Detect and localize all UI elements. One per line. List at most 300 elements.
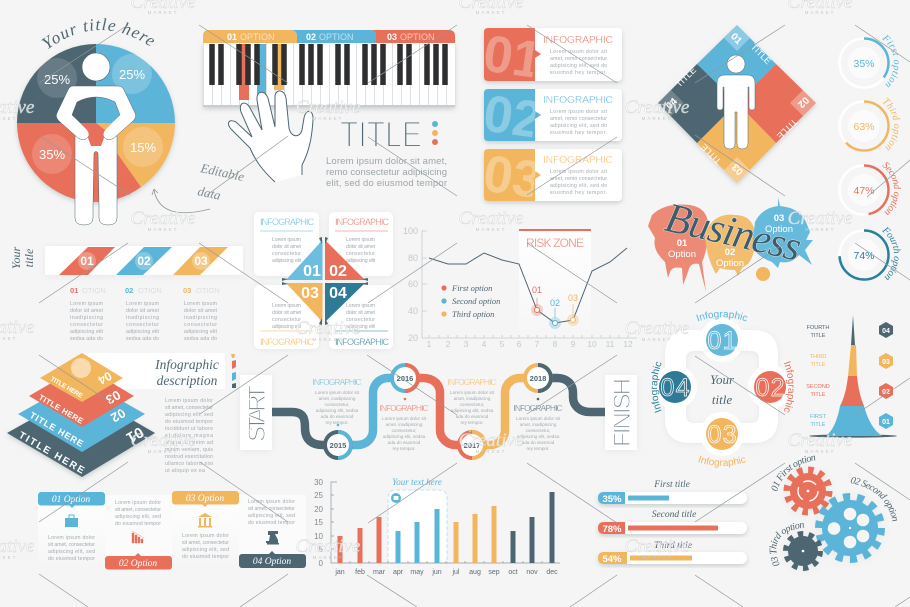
panel: business splats: 03 xyxy=(774,213,784,224)
panel: business splats: Option xyxy=(716,258,744,269)
step 03: adipiscing elit, sed xyxy=(182,547,229,553)
panel: card 02: eiusmod hey tempor. xyxy=(550,130,607,136)
panel: start-finish timeline: ada do eiusmod xyxy=(388,440,421,445)
step 01: do eiusmod tempor xyxy=(48,556,95,562)
panel: start-finish timeline: consectetur, xyxy=(460,402,484,407)
chart: line chart with risk zone: 1 xyxy=(427,339,432,349)
panel: start-finish timeline xyxy=(240,363,637,460)
panel: card 02: adipisicing elit, sed do xyxy=(550,123,607,129)
watermark captions: MARKET xyxy=(642,116,672,121)
step 01: sit amet, consectetur xyxy=(48,542,95,548)
panel: start-finish timeline: Lorem ipsum dolor sit xyxy=(450,390,495,395)
panel: four cards with central diamond: Lorem ipsum xyxy=(346,237,375,243)
panel: four cards with central diamond: consectetur xyxy=(272,251,301,257)
chart: line chart with risk zone: 10 xyxy=(587,339,597,349)
watermark captions: MARKET xyxy=(313,116,343,121)
icon: red gear xyxy=(788,470,828,512)
panel: diamond with person: 01 xyxy=(728,31,744,47)
panel: card 02: 02 xyxy=(480,85,545,150)
step 04: 04 Option xyxy=(253,557,291,567)
panel: card 03: eiusmod hey tempor. xyxy=(550,190,607,196)
step 02: 02 Option xyxy=(119,559,157,569)
step 04: sit amet, consectetur xyxy=(248,506,295,512)
watermarks: Creative xyxy=(131,430,195,451)
panel: card 01: Lorem ipsum dolor sit xyxy=(550,49,608,55)
watermark captions: MARKET xyxy=(805,10,835,15)
icon: dark gear xyxy=(786,534,820,568)
bar 54% xyxy=(598,541,747,565)
legend: Second option xyxy=(452,296,500,306)
option tabs: 03 xyxy=(387,32,397,42)
panel: diagonal ribbon with options: dolor sit amet xyxy=(184,308,218,314)
panel: four cards with central diamond: INFOGRAPHIC xyxy=(335,337,390,347)
step 01: 01 Option xyxy=(52,495,90,505)
chart: monthly bar chart: 10 xyxy=(314,532,324,541)
panel: card 03: amet, remo consectetur xyxy=(550,176,607,182)
chart: tower: TITLE xyxy=(811,333,826,339)
text block: ut aliquip ex ea xyxy=(165,468,205,474)
chart: line chart with risk zone: 40 xyxy=(408,306,418,316)
panel: card 01: INFOGRAPHIC xyxy=(543,34,613,46)
panel: diagonal ribbon with options: consectetur xyxy=(70,322,103,328)
chart: donut 47%: 47% xyxy=(853,185,875,197)
panel: diagonal ribbon with options: sedsa ada do xyxy=(184,336,217,342)
risk zone band: RISK ZONE xyxy=(526,236,584,250)
panel: four cards with central diamond: INFOGRAPHIC xyxy=(335,217,390,227)
panel: four cards with central diamond xyxy=(254,212,393,349)
panel: diagonal ribbon with options: Lorem ipsum xyxy=(126,301,159,307)
panel: start-finish timeline: ada do eiusmod xyxy=(522,440,555,445)
chart: tower: TITLE xyxy=(811,362,826,368)
watermark captions: MARKET xyxy=(642,555,672,560)
chart: tower: SECOND xyxy=(806,384,830,390)
panel: layered stack: TITLE HERE xyxy=(37,393,85,426)
panel: diagonal ribbon with options: 03 xyxy=(194,254,208,268)
chart: monthly bar chart xyxy=(314,477,560,576)
panel: diagonal ribbon with options: dolor sit amet xyxy=(126,308,160,314)
chart: tower: FOURTH xyxy=(807,325,829,331)
watermarks: Creative xyxy=(296,318,360,339)
text block xyxy=(165,398,213,474)
icon: standing person xyxy=(717,55,755,149)
panel: diamond with person: TITLE xyxy=(674,65,698,89)
panel: layered stack: TITLE HERE xyxy=(16,430,86,477)
step 04: do eiusmod tempor xyxy=(248,520,295,526)
panel: start-finish timeline: ada do eiusmod xyxy=(456,414,489,419)
panel: diagonal ribbon with options: inadipiscing xyxy=(126,315,159,321)
step 03 xyxy=(172,491,239,560)
watermarks: Creative xyxy=(296,536,360,557)
panel: card 03: 03 xyxy=(480,145,545,210)
highlight box: Your text here xyxy=(392,477,442,487)
panel: layered stack: 02 xyxy=(108,405,128,426)
icon: person holding belly xyxy=(56,53,136,225)
panel: layered stack: TITLE HERE xyxy=(49,376,84,400)
bar 78%: 78% xyxy=(602,524,622,535)
label: third option: Third option xyxy=(882,98,900,150)
panel: four step loop: Infographic xyxy=(651,362,662,413)
central diamond xyxy=(282,237,368,325)
panel: card 01: adipisicing elit, sed do xyxy=(550,63,607,69)
watermarks: Creative xyxy=(788,208,852,229)
risk zone band xyxy=(519,229,591,336)
panel: four cards with central diamond: dolor sit amet xyxy=(346,310,376,316)
panel: four step loop: 02 xyxy=(756,374,784,402)
panel: layered stack: TITLE HERE xyxy=(28,410,85,449)
central diamond: 01 xyxy=(303,263,321,280)
markers 01 02 03 xyxy=(531,285,579,329)
panel: four option steps xyxy=(38,491,306,570)
text block: et dolore magna xyxy=(165,433,213,439)
chart: monthly bar chart: dec xyxy=(546,569,558,576)
panel: four cards with central diamond: consectetur xyxy=(346,251,375,257)
watermark captions: MARKET xyxy=(148,10,178,15)
center title: Your xyxy=(710,372,735,387)
panel: start-finish timeline: rey tempor. xyxy=(461,420,483,425)
step 02: Lorem ipsum dolor xyxy=(115,500,161,506)
chart: tower: TITLE xyxy=(811,392,826,398)
panel: start-finish timeline: Lorem ipsum dolor sit xyxy=(315,390,360,395)
option tabs: 02 xyxy=(306,32,316,42)
chart: monthly bar chart: jan xyxy=(334,569,345,576)
label: first option: First option xyxy=(882,34,899,88)
chart: donut 63%: 63% xyxy=(853,121,875,133)
chart: line chart with risk zone: 20 xyxy=(408,333,418,343)
option tabs: OPTION xyxy=(400,32,435,42)
panel: four cards with central diamond: INFOGRAPHIC xyxy=(260,217,314,227)
step 02: do eiusmod tempor xyxy=(115,521,161,527)
node 2017: 2017 xyxy=(464,441,480,450)
bar 54%: 54% xyxy=(602,554,622,565)
step 03: 03 Option xyxy=(186,494,224,504)
text block xyxy=(326,156,447,189)
panel: four cards with central diamond: adipiscing elit xyxy=(346,258,376,264)
watermarks: Creative xyxy=(625,536,689,557)
panel: diamond with person: 03 xyxy=(730,161,746,177)
watermarks: Creative xyxy=(296,97,360,118)
panel: diagonal ribbon with options: OTION xyxy=(196,286,220,295)
panel: card 01: 01 xyxy=(480,25,545,90)
chart: tower xyxy=(806,315,897,438)
bar 54%: Third title xyxy=(654,541,692,551)
panel: business splats: Option xyxy=(668,249,696,260)
step 04: adipiscing elit, sed xyxy=(248,513,295,519)
panel: four cards with central diamond: adipiscing elit xyxy=(272,324,302,330)
watermarks: Creative xyxy=(625,97,689,118)
panel: diagonal ribbon with options: inadipiscing xyxy=(70,315,103,321)
bar 35%: 35% xyxy=(602,494,622,505)
panel: card 02 xyxy=(482,89,624,145)
panel: four step loop: 04 xyxy=(660,374,690,402)
watermark captions: MARKET xyxy=(642,337,672,342)
panel: diamond with person xyxy=(658,25,816,183)
markers 01 02 03: 01 xyxy=(532,285,542,295)
start label: START xyxy=(244,385,271,442)
chart: donut 35% xyxy=(838,34,899,88)
panel: card 01: eiusmod hey tempor. xyxy=(550,70,607,76)
chart: monthly bar chart: jun xyxy=(431,569,442,576)
text block: do eiusmod tempor xyxy=(165,419,213,425)
panel: diamond with person: TITLE xyxy=(699,142,723,166)
legend: First option xyxy=(451,283,492,293)
chart: line chart with risk zone: 100 xyxy=(403,226,418,236)
chart: line chart with risk zone: 8 xyxy=(553,339,558,349)
panel: pie chart with person: 15% xyxy=(130,140,156,155)
panel: card 01: amet, remo consectetur xyxy=(550,56,607,62)
panel: diagonal ribbon with options: adipiscing elit xyxy=(126,329,160,335)
panel: layered stack: 01 xyxy=(123,423,146,446)
panel: diagonal ribbon with options: sedsa ada do xyxy=(70,336,103,342)
chart: monthly bar chart: apr xyxy=(393,569,404,576)
panel: pie chart with person: 25% xyxy=(119,67,145,82)
chart: line chart with risk zone: 7 xyxy=(535,339,540,349)
panel: four step loop xyxy=(651,311,794,468)
bar 78%: Second title xyxy=(652,510,696,520)
heading: infographic description: Infographic xyxy=(154,357,219,372)
text block: sit amet, consectetur xyxy=(165,405,213,411)
center title: title xyxy=(712,392,732,407)
option tabs: OPTION xyxy=(240,32,275,42)
text block: adipiscing elit, sed xyxy=(165,412,213,418)
watermarks: Creative xyxy=(788,430,852,451)
node 2016 xyxy=(390,363,420,393)
panel: start-finish timeline: ada do eiusmod xyxy=(321,414,354,419)
panel: business splats: 01 xyxy=(677,238,688,249)
panel: four step loop: Infographic xyxy=(696,311,748,322)
text block: Lorem ipsum dolor sit amet, xyxy=(326,156,447,167)
finish label: FINISH xyxy=(609,378,636,447)
panel: layered stack: 03 xyxy=(103,387,123,408)
chart: donut 63% xyxy=(838,98,900,152)
panel: card 03: Lorem ipsum dolor sit xyxy=(550,169,608,175)
label: your title: Your xyxy=(9,247,23,269)
watermarks: Creative xyxy=(625,318,689,339)
callout: editable data: Editable xyxy=(198,160,246,184)
watermarks: Creative xyxy=(459,430,523,451)
label: fourth option: Fourth option xyxy=(882,226,901,280)
panel: start-finish timeline: rey tempor. xyxy=(326,420,348,425)
panel: start-finish timeline: amet, inadipiscing xyxy=(319,396,356,401)
panel: four cards with central diamond: adipiscing elit xyxy=(272,258,302,264)
panel: diamond with person: 02 xyxy=(795,94,811,110)
label: second option: Second option xyxy=(882,162,901,215)
panel: start-finish timeline: adipiscing elit, sedsa xyxy=(451,408,494,413)
panel: start-finish timeline: adipiscing elit, sedsa xyxy=(517,434,560,439)
step 04 xyxy=(239,499,306,568)
watermark captions: MARKET xyxy=(476,227,506,232)
text block: aliqua. Ut enim ad xyxy=(165,440,213,446)
panel: diagonal ribbon with options: 02 xyxy=(137,254,151,268)
chart: monthly bar chart: sep xyxy=(488,569,500,576)
watermarks: Creative xyxy=(459,208,523,229)
panel: diagonal ribbon with options: adipiscing elit xyxy=(184,329,218,335)
panel: diagonal ribbon with options: 03 xyxy=(183,286,191,295)
watermark captions: MARKET xyxy=(313,337,343,342)
panel: diagonal ribbon with options: Lorem ipsum xyxy=(184,301,217,307)
panel: card 03 xyxy=(482,149,624,205)
step 01 xyxy=(38,492,105,562)
panel: diagonal ribbon with options: dolor sit amet xyxy=(70,308,104,314)
chart: monthly bar chart: mar xyxy=(373,569,386,576)
chart: tower: THIRD xyxy=(810,354,826,360)
text block: Lorem ipsum dolor xyxy=(165,398,213,404)
node 2016: 2016 xyxy=(397,374,413,383)
panel: diagonal ribbon with options: sedsa ada do xyxy=(126,336,159,342)
node 2017 xyxy=(457,430,487,460)
step 03: sit amet, consectetur xyxy=(182,540,229,546)
panel: four step loop: Infographic xyxy=(698,456,746,468)
panel: layered stack xyxy=(7,353,236,477)
panel: start-finish timeline: Lorem ipsum dolor sit xyxy=(382,416,427,421)
chart: line chart with risk zone: 80 xyxy=(408,253,418,263)
node 2018 xyxy=(523,363,553,393)
chart: line chart with risk zone: 2 xyxy=(446,339,451,349)
panel: diagonal ribbon with options: inadipiscing xyxy=(184,315,217,321)
central diamond: 02 xyxy=(329,263,347,280)
panel: gears: 02 Second option xyxy=(850,477,898,522)
chart: monthly bar chart: 5 xyxy=(319,545,324,554)
chart: line chart with risk zone: 3 xyxy=(464,339,469,349)
panel: start-finish timeline: INFOGRAPHIC xyxy=(514,403,562,413)
panel: pie chart with person: 35% xyxy=(39,147,65,162)
chart: tower: 03 xyxy=(882,359,890,366)
center title xyxy=(710,372,735,407)
chart: line chart with risk zone: 11 xyxy=(606,339,615,349)
panel: card 03: adipisicing elit, sed do xyxy=(550,183,607,189)
panel: diagonal ribbon with options: OTION xyxy=(138,286,162,295)
panel: piano keyboard xyxy=(203,30,455,107)
panel: diagonal ribbon with options: consectetur xyxy=(126,322,159,328)
chart: donut 74%: 74% xyxy=(853,250,875,262)
chart: monthly bar chart: oct xyxy=(508,569,518,576)
panel: pie chart with person xyxy=(17,44,175,225)
panel: diagonal ribbon with options: Lorem ipsum xyxy=(70,301,103,307)
heading: business: Business xyxy=(661,195,806,271)
panel: diagonal ribbon with options: 02 xyxy=(125,286,133,295)
chart: monthly bar chart: 0 xyxy=(319,559,324,568)
text block: remo consectetur adipisicing xyxy=(326,167,447,178)
panel: four cards with central diamond: dolor sit amet xyxy=(272,310,302,316)
step 03: Lorem ipsum dolor xyxy=(182,533,229,539)
chart: monthly bar chart: feb xyxy=(355,569,365,576)
highlight box xyxy=(388,477,447,563)
step 01: adipiscing elit, sed xyxy=(48,549,95,555)
panel: diamond with person: TITLE xyxy=(775,117,799,141)
callout: editable data: data xyxy=(196,183,223,203)
chart: tower: 02 xyxy=(882,389,890,396)
chart: tower: 01 xyxy=(882,419,890,426)
chart: tower: 04 xyxy=(882,328,890,335)
panel: four cards with central diamond: consectetur xyxy=(272,317,301,323)
watermark captions: MARKET xyxy=(476,10,506,15)
chart: monthly bar chart: 15 xyxy=(314,518,324,527)
step 02: adipiscing elit, sed xyxy=(115,514,161,520)
panel: four cards with central diamond: adipiscing elit xyxy=(346,324,376,330)
chart: tower: FIRST xyxy=(810,414,827,420)
panel: four step loop: Infographic xyxy=(784,361,794,412)
label: your title: title xyxy=(22,248,36,267)
watermark captions: MARKET xyxy=(148,227,178,232)
watermark captions: MARKET xyxy=(313,555,343,560)
panel: start-finish timeline: INFOGRAPHIC xyxy=(380,403,428,413)
chart: line chart with risk zone: 12 xyxy=(623,339,633,349)
legend xyxy=(441,283,500,319)
bar 35% xyxy=(598,480,747,505)
panel: pie chart with person: 25% xyxy=(44,72,70,87)
chart: line chart with risk zone: 6 xyxy=(517,339,522,349)
watermark captions: MARKET xyxy=(148,449,178,454)
heading: your title here: Your title here xyxy=(42,18,154,49)
panel: diamond with person: TITLE xyxy=(749,42,773,66)
central diamond: 03 xyxy=(301,285,319,302)
chart: tower: TITLE xyxy=(811,422,826,428)
panel: diagonal ribbon with options: adipiscing elit xyxy=(70,329,104,335)
panel: gears xyxy=(769,456,898,571)
panel: diagonal ribbon with options: consectetur xyxy=(184,322,217,328)
panel: card 02: Lorem ipsum dolor sit xyxy=(550,109,608,115)
option tabs xyxy=(203,30,455,43)
panel: start-finish timeline: consectetur, xyxy=(526,428,550,433)
markers 01 02 03: 02 xyxy=(550,298,560,308)
panel: start-finish timeline: rey tempor. xyxy=(527,446,549,451)
chart: monthly bar chart: nov xyxy=(526,569,538,576)
panel: start-finish timeline: INFOGRAPHIC xyxy=(312,377,362,387)
chart: donut 47% xyxy=(838,162,901,216)
panel: start-finish timeline: consectetur, xyxy=(325,402,349,407)
icon: hand on keys xyxy=(229,91,313,182)
panel: layered stack: 04 xyxy=(95,369,114,388)
panel: diagonal ribbon with options: 01 xyxy=(80,254,94,268)
node 2018: 2018 xyxy=(530,374,546,383)
panel: start-finish timeline: amet, inadipiscing xyxy=(386,422,423,427)
panel: four step loop: 03 xyxy=(708,421,736,449)
watermark captions: MARKET xyxy=(476,449,506,454)
text block: minim veniam, quis xyxy=(165,447,213,453)
step 01: Lorem ipsum dolor xyxy=(48,535,95,541)
heading: infographic description: description xyxy=(157,373,218,388)
title block xyxy=(326,114,447,189)
title block: TITLE xyxy=(340,114,422,155)
panel: four cards with central diamond: INFOGRAPHIC xyxy=(260,337,314,347)
step 02: sit amet, consectetur xyxy=(115,507,161,513)
panel: four cards with central diamond: Lorem ipsum xyxy=(272,237,301,243)
panel: four cards with central diamond: dolor sit amet xyxy=(346,244,376,250)
callout: editable data xyxy=(152,160,246,213)
chart: monthly bar chart: 25 xyxy=(314,491,324,500)
panel: four cards with central diamond: Lorem ipsum xyxy=(272,303,301,309)
panel: start-finish timeline: Lorem ipsum dolor sit xyxy=(516,416,561,421)
chart: line chart with risk zone: 9 xyxy=(571,339,576,349)
step 02 xyxy=(105,500,172,570)
chart: line chart with risk zone xyxy=(403,226,637,349)
chart: monthly bar chart: aug xyxy=(469,569,481,576)
panel: start-finish timeline: amet, inadipiscing xyxy=(520,422,557,427)
panel: card 03: INFOGRAPHIC xyxy=(543,154,613,166)
panel: card 01 xyxy=(482,28,624,85)
node 2015 xyxy=(323,430,353,460)
option tabs: OPTION xyxy=(319,32,354,42)
panel: progress bars xyxy=(598,480,747,565)
panel: diagonal ribbon with options: OTION xyxy=(82,286,106,295)
panel: start-finish timeline: amet, inadipiscing xyxy=(454,396,491,401)
panel: four cards with central diamond: dolor sit amet xyxy=(272,244,302,250)
icon: blue gear xyxy=(819,497,881,559)
chart: line chart with risk zone: 4 xyxy=(482,339,487,349)
text block: elit, sed do eiusmod tempor xyxy=(326,178,447,189)
panel: start-finish timeline: adipiscing elit, sedsa xyxy=(383,434,426,439)
label: your title xyxy=(9,247,36,269)
chart: monthly bar chart: jul xyxy=(451,569,460,576)
